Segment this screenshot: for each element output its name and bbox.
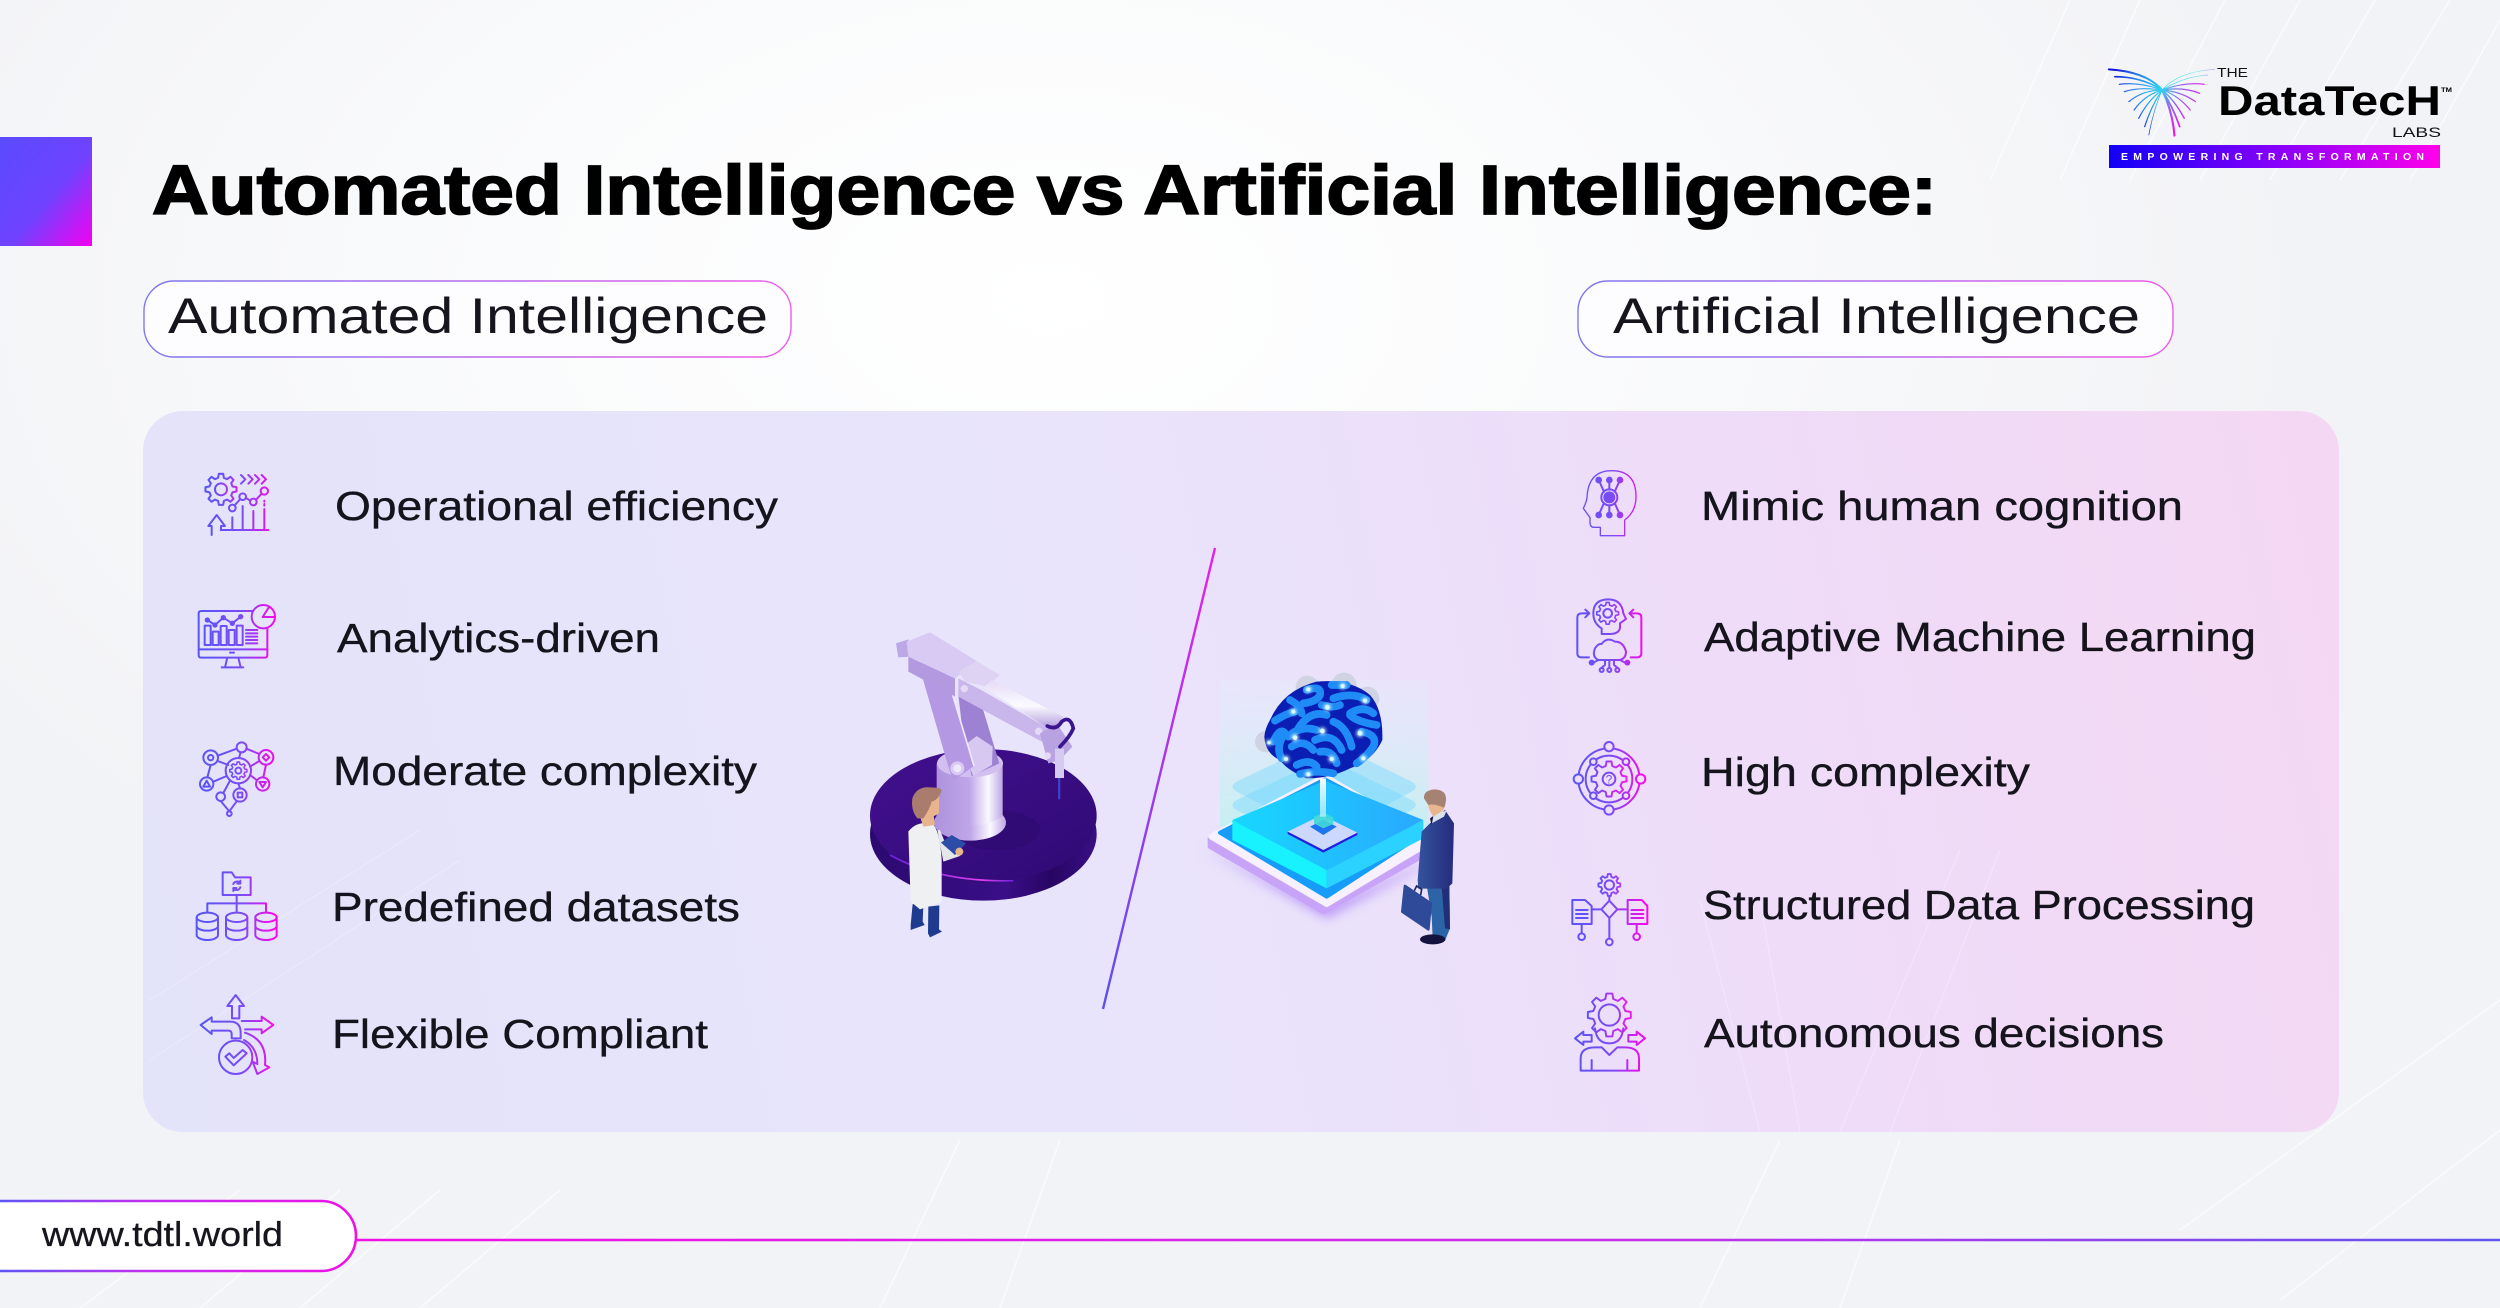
left column: automated intelligence items — [197, 474, 779, 1074]
logo tagline bar: EMPOWERING TRANSFORMATION — [2121, 151, 2424, 163]
logo butterfly mark — [2109, 69, 2215, 136]
heading pill: Automated Intelligence: Automated Intelligence — [168, 288, 768, 344]
diagonal divider — [1103, 548, 1215, 1009]
label: Adaptive Machine Learning: Adaptive Machine Learning — [1704, 614, 2256, 660]
businessman with briefcase — [1402, 789, 1454, 944]
logo tagline bar — [2109, 145, 2440, 168]
robot arm — [896, 632, 1073, 799]
floating layers — [1232, 740, 1416, 855]
label: Operational efficiency: Operational efficiency — [335, 483, 779, 529]
icon: predefined datasets — [197, 872, 277, 940]
neural brain — [1255, 673, 1382, 778]
icon: high complexity gear rings — [1574, 742, 1645, 815]
footer website pill — [0, 1201, 356, 1271]
engineer in lab coat — [908, 787, 966, 937]
logo wordmark: TM — [2441, 88, 2452, 94]
illustration: robotic arm with engineer — [870, 632, 1097, 937]
hologram glow — [1220, 680, 1428, 827]
icon: moderate complexity network — [200, 742, 273, 816]
logo wordmark: DataTecH — [2218, 77, 2441, 124]
accent square — [0, 137, 92, 246]
label: Mimic human cognition: Mimic human cognition — [1701, 483, 2183, 529]
logo: The DataTech Labs — [2109, 65, 2452, 168]
label: Analytics-driven: Analytics-driven — [337, 615, 660, 661]
icon: flexible compliant arrows — [201, 995, 273, 1074]
icon: autonomous decisions person with gear — [1575, 994, 1645, 1071]
icon: structured data processing — [1572, 874, 1647, 945]
title: Automated Intelligence vs Artificial Intelligence: — [152, 151, 1937, 229]
logo wordmark: THE — [2217, 65, 2248, 80]
robot base cylinder — [934, 749, 1006, 841]
label: Predefined datasets: Predefined datasets — [332, 884, 740, 930]
label: Autonomous decisions: Autonomous decisions — [1704, 1010, 2164, 1056]
icon: analytics dashboard — [199, 605, 275, 667]
icon: adaptive machine learning — [1577, 599, 1641, 672]
icon: mimic human cognition head — [1583, 471, 1636, 536]
platform base — [1200, 777, 1447, 917]
comparison panel — [143, 411, 2339, 1132]
heading pill: Artificial Intelligence — [1578, 281, 2173, 357]
footer rule — [356, 1239, 2500, 1241]
label: Flexible Compliant: Flexible Compliant — [332, 1011, 709, 1057]
data chip and beam — [1288, 778, 1357, 853]
label: Structured Data Processing: Structured Data Processing — [1703, 882, 2255, 928]
robot platform disk — [870, 749, 1097, 901]
footer website pill: www.tdtl.world — [41, 1216, 283, 1254]
heading pill: Artificial Intelligence: Artificial Intelligence — [1613, 288, 2140, 344]
icon: high complexity gear rings: ? — [1606, 773, 1613, 787]
logo wordmark: LABS — [2392, 124, 2441, 140]
heading pill: Automated Intelligence — [144, 281, 791, 357]
illustration: AI brain platform with businessman — [1200, 673, 1454, 944]
label: Moderate complexity: Moderate complexity — [333, 748, 758, 794]
right column: artificial intelligence items — [1572, 471, 2256, 1071]
icon: operational efficiency — [205, 474, 268, 535]
logo wordmark — [2217, 65, 2452, 140]
label: High complexity: High complexity — [1701, 749, 2031, 795]
